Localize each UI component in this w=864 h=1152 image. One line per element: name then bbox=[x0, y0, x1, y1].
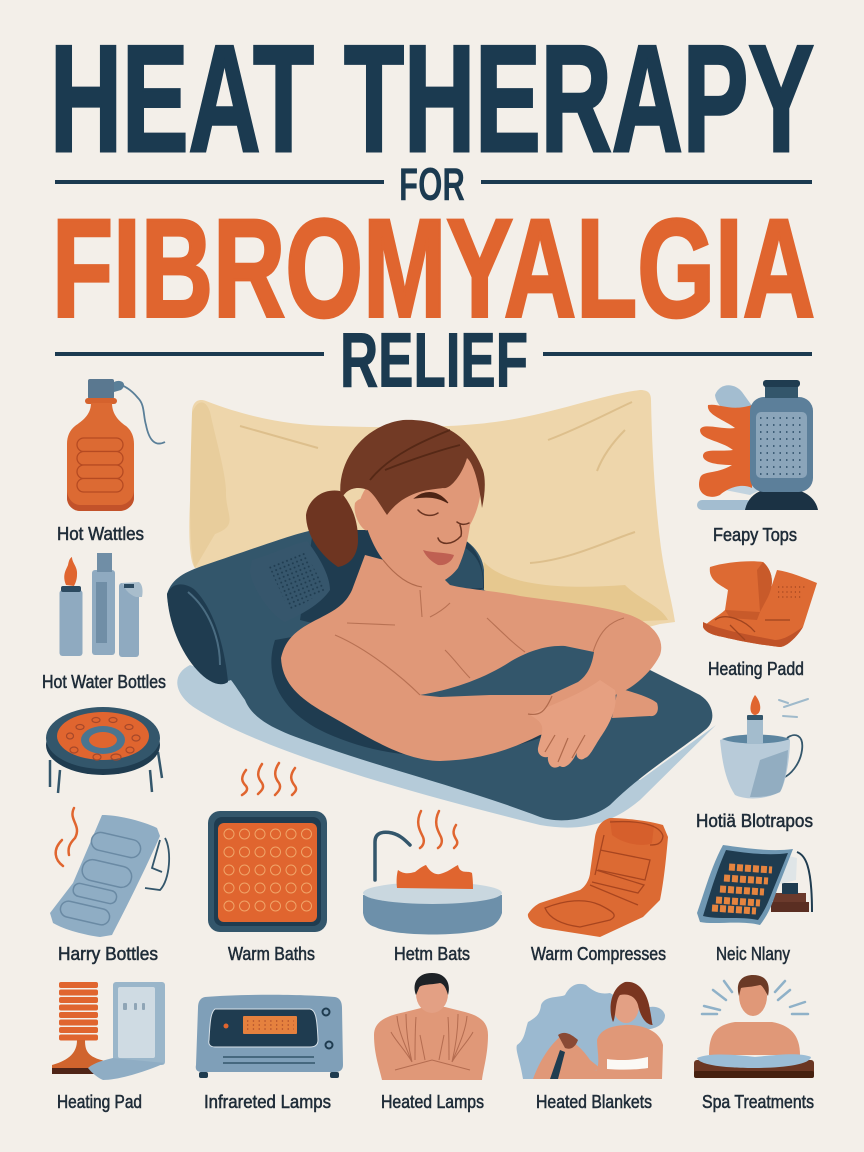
icon: orange heating pads bbox=[703, 561, 817, 647]
icon: man with hands on chest bbox=[374, 973, 488, 1080]
icon: heat waves above warm pad bbox=[242, 763, 296, 795]
torso and arms bbox=[281, 555, 661, 761]
icon: warm square pad bbox=[208, 811, 327, 932]
icon: heating pad radiator bbox=[52, 982, 165, 1080]
icon: spa man bbox=[694, 975, 814, 1078]
pillow bbox=[189, 390, 675, 640]
heading: relief: RELIEF bbox=[340, 318, 528, 404]
closed eyes, nose and mouth bbox=[418, 510, 469, 543]
icon: electric pad bbox=[697, 845, 812, 925]
central illustration: woman resting on heating pad bbox=[167, 390, 716, 828]
icon: warm compress seat bbox=[528, 818, 668, 937]
heading: relief bbox=[55, 318, 812, 404]
label: feapy tops: Feapy Tops bbox=[713, 524, 797, 545]
skin creases bbox=[335, 590, 624, 695]
icon: hot water bottles group bbox=[60, 553, 143, 657]
label: warm baths: Warm Baths bbox=[228, 943, 315, 964]
title: heat therapy bbox=[50, 14, 814, 184]
icon: feapy tops device bbox=[697, 380, 818, 510]
label: infrared lamps: Infrareted Lamps bbox=[204, 1091, 331, 1112]
hair bbox=[340, 420, 485, 515]
label: warm compresses: Warm Compresses bbox=[531, 943, 666, 964]
ear bbox=[355, 499, 372, 530]
icon: harry bottles pad bbox=[50, 808, 169, 937]
mat shadow bbox=[177, 665, 716, 828]
icon: bath tub bbox=[363, 811, 502, 934]
label: spa treatments: Spa Treatments bbox=[702, 1091, 814, 1112]
eyebrows bbox=[415, 493, 448, 503]
label: harry bottles: Harry Bottles bbox=[58, 943, 158, 964]
heading: for: FOR bbox=[399, 158, 465, 210]
label: heating pad bottom: Heating Pad bbox=[57, 1091, 142, 1112]
neck pad bbox=[250, 541, 330, 622]
mat roll end bbox=[167, 584, 228, 684]
icon: round heater bbox=[46, 707, 162, 793]
heating mat bbox=[167, 530, 712, 820]
far hand bbox=[612, 688, 658, 718]
label: hetm bats: Hetm Bats bbox=[394, 943, 470, 964]
near hand bbox=[530, 680, 616, 768]
face bbox=[360, 452, 481, 586]
label: hotia blotrapos: Hotiä Blotrapos bbox=[696, 810, 813, 831]
icon: cup with candle bbox=[720, 695, 808, 798]
label: heated lamps: Heated Lamps bbox=[381, 1091, 484, 1112]
heading: for bbox=[55, 158, 812, 210]
title: heat therapy: HEAT bbox=[50, 14, 314, 184]
label: heating padd: Heating Padd bbox=[708, 658, 804, 679]
label: neic nlany: Neic Nlany bbox=[716, 943, 791, 964]
mat dark contact shadow bbox=[271, 600, 620, 756]
label: hot water bottles: Hot Water Bottles bbox=[42, 671, 166, 692]
blanket over chest bbox=[420, 646, 594, 697]
label: hot wattles: Hot Wattles bbox=[57, 523, 144, 544]
label: heated blankets: Heated Blankets bbox=[536, 1091, 652, 1112]
icon: hot wattles bottle bbox=[67, 379, 165, 511]
icon: infrared device bbox=[196, 995, 343, 1078]
icon: woman under blanket bbox=[517, 982, 665, 1079]
bun bbox=[306, 491, 358, 567]
